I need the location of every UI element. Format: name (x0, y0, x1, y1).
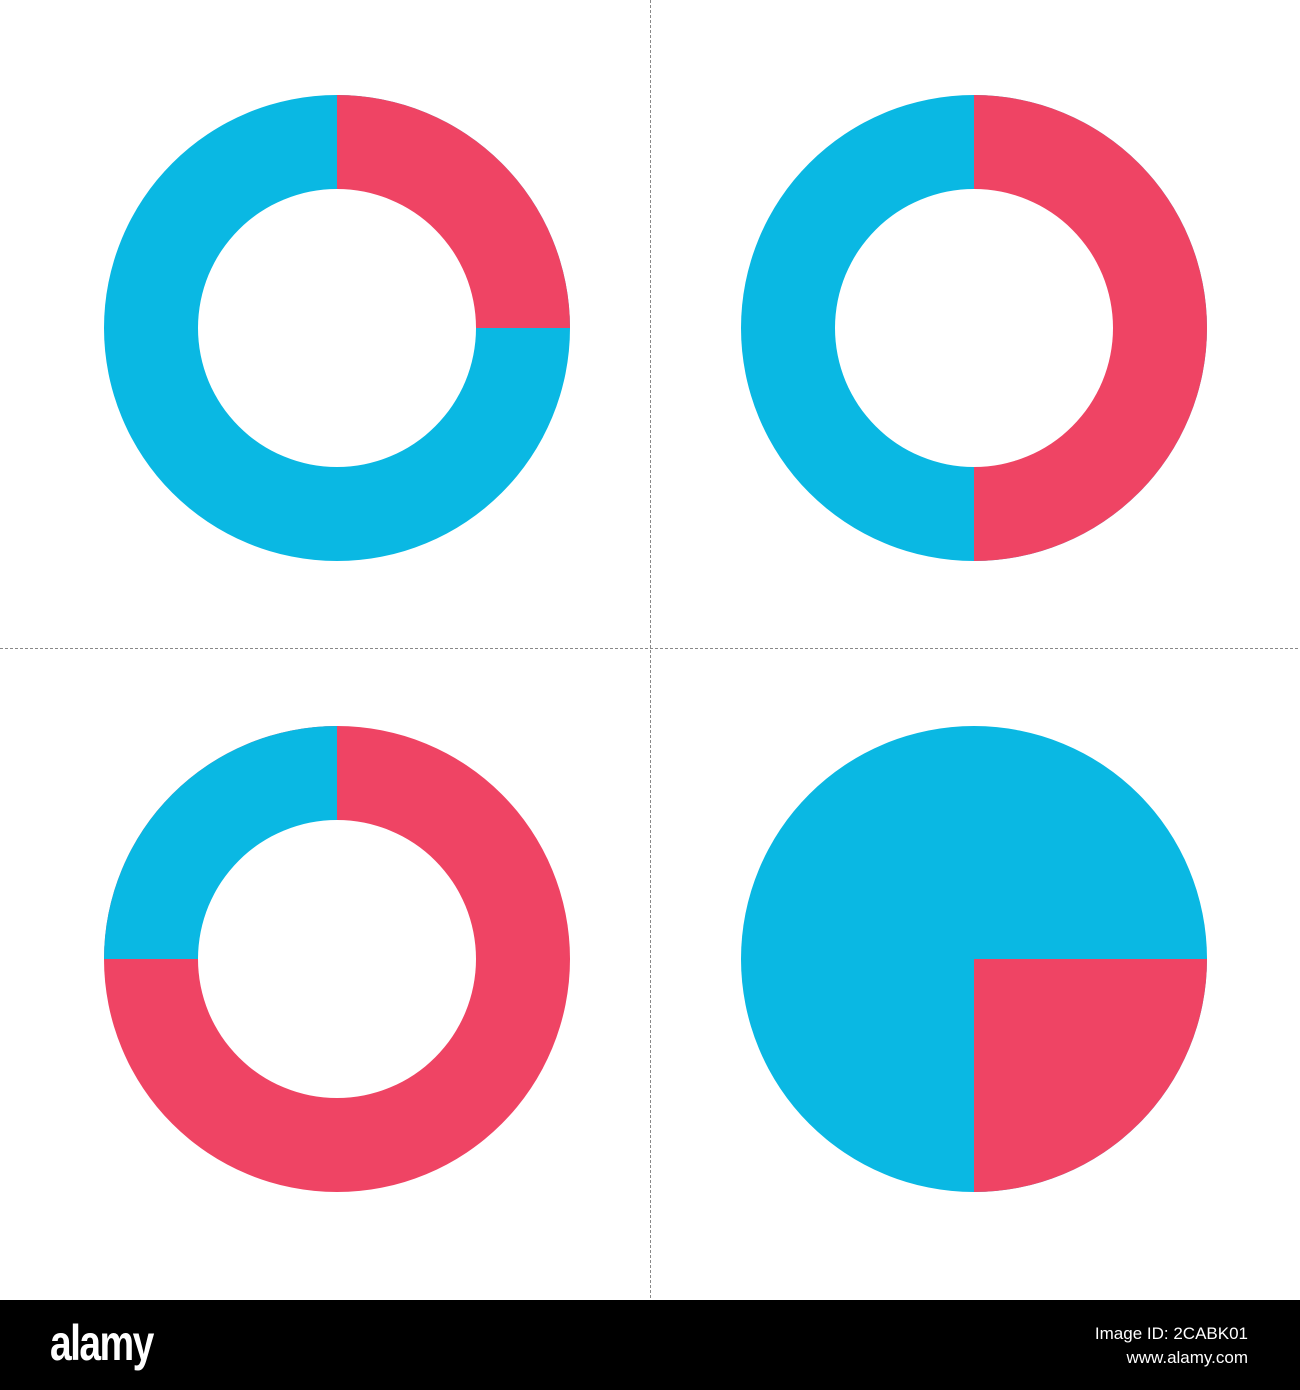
donut: 50% red (741, 95, 1207, 561)
footer image id: www.alamy.com (1126, 1348, 1248, 1367)
donut: 75% red (104, 726, 570, 1192)
pie: 25% red (741, 726, 1207, 1192)
footer image id: Image ID: 2CABK01 (1095, 1324, 1248, 1343)
footer image id (1095, 1324, 1248, 1367)
footer logo: alamy (50, 1315, 153, 1371)
footer bar (0, 1300, 1300, 1390)
donut: 25% red (104, 95, 570, 561)
